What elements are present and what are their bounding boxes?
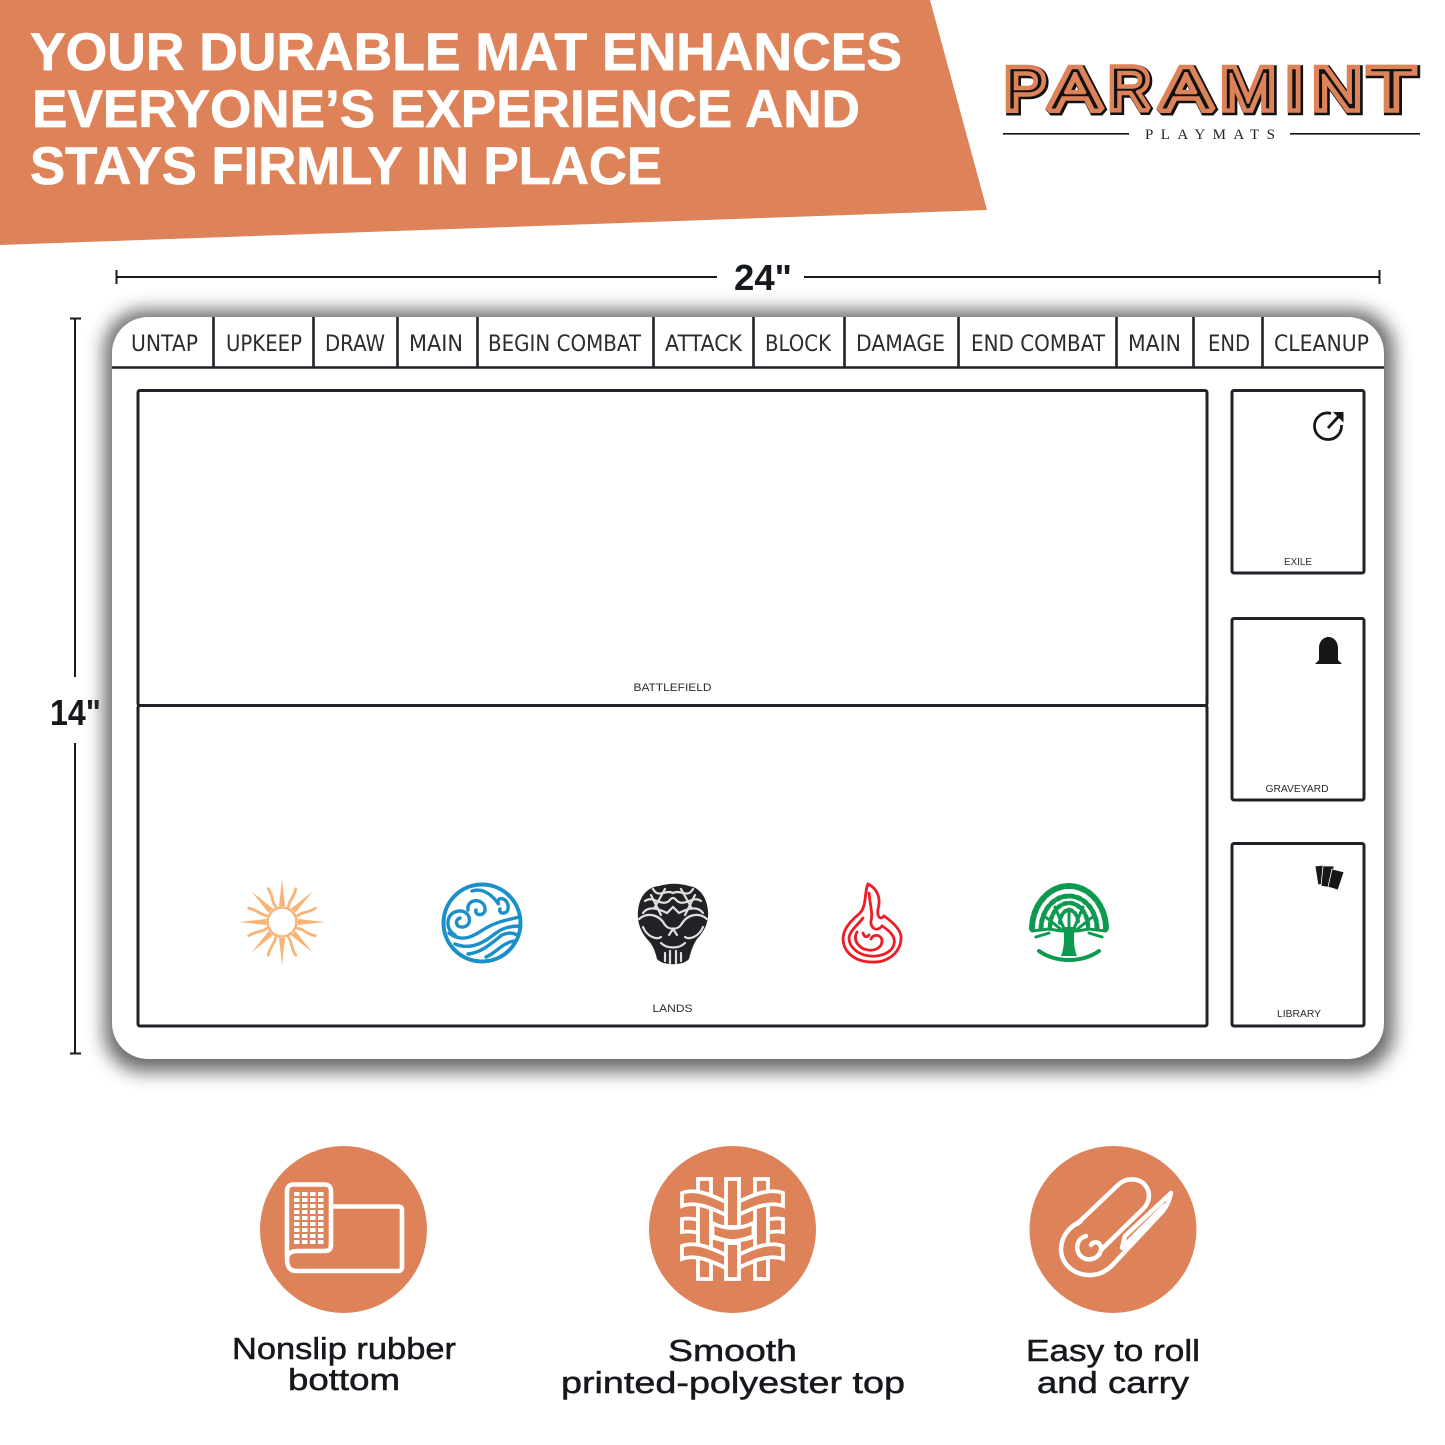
logo: Paramint Playmats: T [1370,57,1416,124]
logo: Paramint Playmats: A [1049,56,1101,122]
height dimension: 14 inches [50,318,101,1054]
logo: Paramint Playmats: PLAYMATS [1145,127,1275,143]
feature: smooth printed-polyester top [561,1146,905,1400]
exile zone [1232,390,1364,573]
caption: Nonslip rubber [232,1331,456,1366]
heading text: STAYS FIRMLY IN PLACE [30,137,662,196]
exile zone: EXILE [1284,557,1312,568]
icon: skull [638,884,708,964]
phase bar: ATTACK [665,332,743,357]
icon: exile arrow [1314,412,1344,440]
logo: Paramint Playmats: A [1050,57,1102,124]
phase bar: DRAW [325,332,385,357]
phase bar: UPKEEP [226,332,302,357]
logo: Paramint Playmats: A [1160,56,1212,122]
icon: sun [239,879,325,965]
caption [1026,1333,1200,1400]
logo: Paramint Playmats: M [1220,56,1276,122]
logo: Paramint Playmats: M [1220,56,1276,122]
logo: Paramint Playmats: A [1049,56,1101,122]
logo: Paramint Playmats: A [1160,56,1212,122]
caption: and carry [1037,1365,1190,1400]
battlefield zone: BATTLEFIELD [634,682,712,694]
library zone: LIBRARY [1277,1009,1321,1020]
caption: Smooth [668,1333,797,1368]
graveyard zone [1232,618,1364,800]
feature: easy to roll and carry [1026,1146,1200,1400]
caption: bottom [288,1362,400,1397]
logo: Paramint Playmats: N [1314,57,1364,124]
heading text: EVERYONE’S EXPERIENCE AND [32,80,860,139]
heading banner [0,0,987,245]
logo: Paramint Playmats: R [1108,56,1151,122]
caption [232,1331,456,1397]
phase bar: CLEANUP [1274,332,1369,357]
logo: Paramint Playmats: P [1004,56,1046,122]
logo: Paramint Playmats: I [1286,57,1304,124]
width dimension: 24 inches [116,257,1380,298]
logo: Paramint Playmats: P [1004,56,1046,122]
icon: fire [843,884,901,962]
logo: Paramint Playmats: T [1368,56,1415,122]
phase bar: MAIN [1128,332,1181,357]
logo: Paramint Playmats: T [1368,56,1415,122]
icon: mat with dotted underside [260,1146,427,1313]
logo: Paramint Playmats: N [1312,56,1362,122]
icon: tombstone [1315,637,1342,664]
lands zone: LANDS [652,1003,692,1015]
feature: nonslip rubber bottom [232,1146,456,1397]
icon: rolled mat [1030,1146,1196,1313]
logo: Paramint Playmats: N [1312,56,1362,122]
library zone [1232,844,1364,1026]
phase bar: BLOCK [765,332,832,357]
phase bar: UNTAP [131,332,198,357]
icon: woven fabric [649,1146,816,1313]
phase bar [112,317,1384,368]
phase bar: END COMBAT [971,332,1106,357]
graveyard zone: GRAVEYARD [1266,784,1328,795]
playmat [104,310,1394,1072]
lands zone [138,706,1207,1026]
phase bar: END [1208,332,1250,357]
battlefield zone [138,390,1207,706]
logo: Paramint Playmats [1003,56,1420,143]
icon: cards [1315,865,1344,890]
caption: Easy to roll [1026,1333,1200,1368]
heading text: YOUR DURABLE MAT ENHANCES [30,23,902,82]
caption [561,1333,905,1400]
logo: Paramint Playmats: R [1110,57,1152,124]
icon: water [444,884,520,962]
phase bar: DAMAGE [856,332,945,357]
phase bar: BEGIN COMBAT [488,332,642,357]
caption: printed-polyester top [561,1365,905,1400]
icon: tree [1032,886,1106,960]
logo: Paramint Playmats: P [1006,57,1048,124]
logo: Paramint Playmats: A [1162,57,1214,124]
logo: Paramint Playmats: I [1285,56,1303,122]
phase bar: MAIN [409,332,463,357]
heading text [30,23,902,196]
logo: Paramint Playmats: R [1108,56,1151,122]
logo: Paramint Playmats: I [1285,56,1303,122]
width dimension: 24 inches: 24" [734,257,792,298]
logo: Paramint Playmats: M [1222,57,1278,124]
height dimension: 14 inches: 14" [50,692,101,733]
